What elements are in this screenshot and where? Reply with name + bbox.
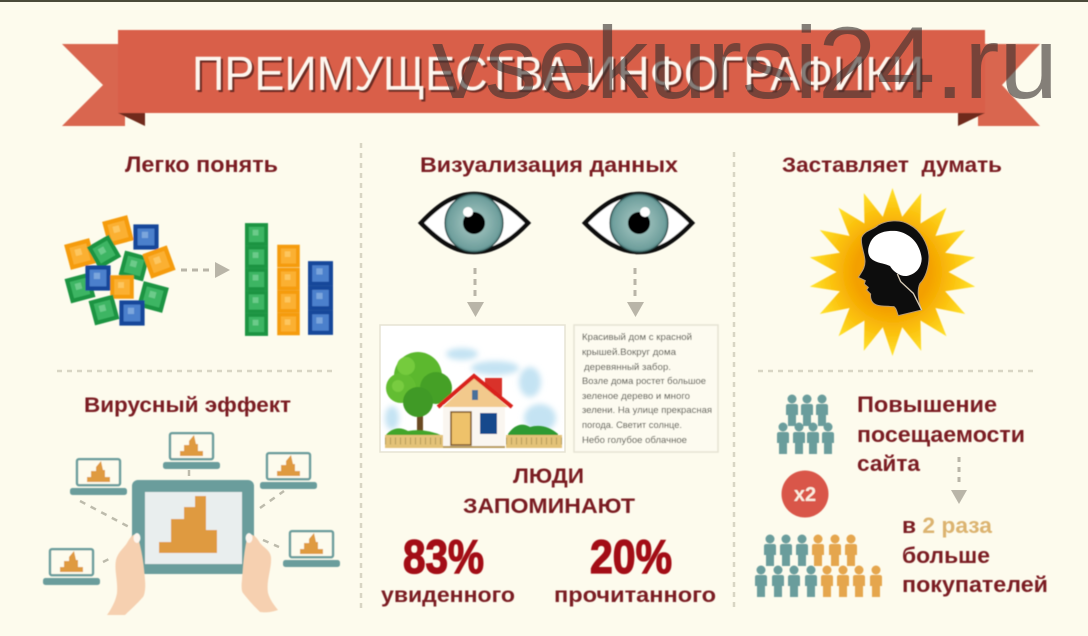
panel: house description text: крышей.Вокруг дома: [582, 347, 677, 358]
badge: x2: [782, 470, 828, 518]
text: people remember: ЛЮДИ: [513, 465, 584, 488]
arrow: traffic to buyers: [951, 457, 967, 504]
arrow: blocks to stacks: [181, 262, 230, 278]
icon: tablet with chart: [132, 480, 254, 574]
text: increased traffic: посещаемости: [857, 422, 1025, 447]
icon: laptops: [43, 433, 340, 585]
panel: house description text: зеленое дерево и много: [582, 391, 690, 402]
text: increased traffic: [857, 392, 1025, 476]
heading: viral effect: Вирусный эффект: [84, 393, 291, 417]
stat: 20% read: [554, 530, 716, 607]
panel: house description text: деревянный забор.: [584, 362, 671, 373]
panel: house description text: Небо голубое облачное: [582, 435, 687, 446]
icon: right eye: [585, 194, 692, 252]
panel: house description text: зелени. На улице прекрасная: [582, 405, 712, 416]
icon: sorted block columns: [245, 223, 333, 336]
stat: 20% read: 20%: [590, 530, 672, 583]
text: people remember: ЗАПОМИНАЮТ: [463, 495, 635, 518]
text: people remember: [463, 465, 635, 518]
panel: house description text: Красивый дом с красной: [582, 332, 692, 343]
arrow: right eye to text: [627, 268, 644, 317]
panel: house description text: Возле дома ростет большое: [582, 376, 706, 387]
watermark: vsekursi24.ru: [432, 6, 1058, 120]
text: twice as many buyers: покупателей: [902, 572, 1048, 597]
banner ribbon: [62, 30, 1040, 126]
icon: left eye: [421, 194, 528, 252]
icon: scattered blocks: [64, 215, 176, 326]
text: increased traffic: сайта: [857, 451, 921, 476]
text: twice as many buyers: больше: [902, 543, 990, 568]
text: increased traffic: Повышение: [857, 392, 997, 417]
stat: 83% seen: [381, 530, 515, 607]
icon: sunburst: [810, 188, 975, 356]
arrow: left eye to picture: [467, 268, 484, 317]
badge: x2: x2: [794, 484, 816, 506]
stat: 83% seen: 83%: [403, 530, 484, 583]
heading: data visualization: Визуализация данных: [420, 153, 678, 177]
icon: visitors group: [777, 394, 834, 454]
stat: 83% seen: увиденного: [381, 584, 515, 607]
text: twice as many buyers: в 2 раза: [902, 513, 993, 538]
title: ПРЕИМУЩЕСТВА ИНФОГРАФИКИ: [192, 48, 924, 101]
panel: house description text: [574, 325, 718, 452]
text: twice as many buyers: [902, 513, 1048, 597]
icon: doubled buyers group: [755, 534, 882, 597]
panel: house description text: погода. Светит солнце.: [582, 420, 682, 431]
title: ПРЕИМУЩЕСТВА ИНФОГРАФИКИ: [194, 50, 926, 103]
icon: head with brain: [858, 221, 929, 316]
viral connector lines: [80, 470, 284, 562]
heading: makes you think: Заставляет думать: [782, 153, 1002, 177]
stat: 20% read: прочитанного: [554, 584, 716, 607]
icon: hands holding tablet: [107, 533, 278, 615]
heading: easy to understand: Легко понять: [125, 152, 278, 177]
panel: house picture: [380, 325, 565, 452]
